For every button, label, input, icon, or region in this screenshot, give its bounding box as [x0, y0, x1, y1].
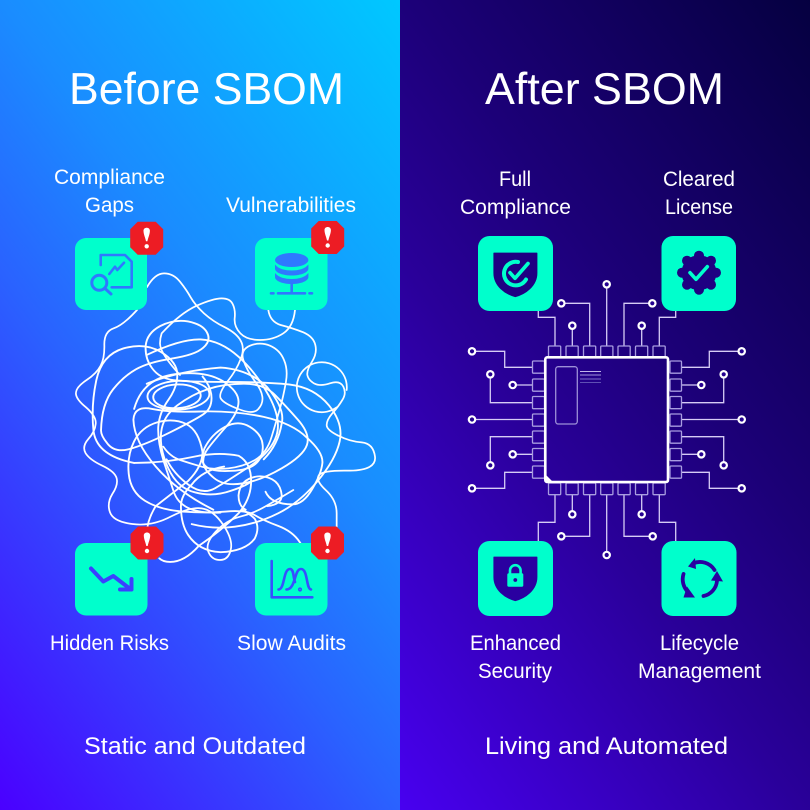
label: Enhanced Security: [470, 632, 561, 683]
badge: alert: [311, 526, 344, 560]
badge: alert: [311, 221, 344, 254]
tile: lifecycle management: [662, 541, 736, 616]
title: Before SBOM: Before SBOM: [69, 65, 344, 114]
circuit traces: [475, 288, 738, 552]
label: Lifecycle Management: [638, 632, 761, 683]
tile: slow audits: [255, 526, 344, 616]
label: Slow Audits: Slow Audits: [237, 632, 346, 655]
chip pads: [532, 346, 682, 495]
title: After SBOM: After SBOM: [485, 65, 724, 114]
label: Full Compliance: [460, 168, 571, 219]
label: Lifecycle Management: Management: [638, 660, 761, 683]
label: Compliance Gaps: Compliance: [54, 166, 165, 189]
tangled lines: [76, 273, 375, 562]
panel: before SBOM: [0, 0, 400, 810]
label: Lifecycle Management: Lifecycle: [660, 632, 739, 655]
caption: Living and Automated: Living and Automated: [485, 733, 728, 760]
label: Cleared License: License: [665, 196, 733, 219]
caption: Static and Outdated: Static and Outdated: [84, 733, 306, 760]
tile: vulnerabilities: [255, 221, 344, 310]
label: Compliance Gaps: Gaps: [85, 194, 134, 217]
label: Compliance Gaps: [54, 166, 165, 217]
label: Hidden Risks: Hidden Risks: [50, 632, 169, 655]
tile: cleared license: [662, 236, 736, 311]
icon: shield with padlock: [494, 557, 537, 600]
label: Cleared License: Cleared: [663, 168, 735, 191]
tile: hidden risks: [75, 526, 164, 616]
tile: enhanced security: [478, 541, 553, 616]
panel: after SBOM: [400, 0, 810, 810]
icon: database: [271, 253, 312, 293]
label: Cleared License: [663, 168, 735, 219]
microchip: [545, 357, 668, 482]
label: Full Compliance: Full: [499, 168, 531, 191]
label: Full Compliance: Compliance: [460, 196, 571, 219]
icon: circular arrows: [683, 558, 723, 598]
icon: shield with check: [494, 253, 537, 296]
badge: alert: [130, 526, 164, 560]
icon: bell curve chart: [272, 561, 312, 597]
circuit nodes: [469, 281, 745, 558]
icon: seal with check: [677, 251, 721, 295]
tile: compliance gaps: [75, 222, 163, 310]
tile: full compliance: [478, 236, 553, 311]
icon: report with magnifier: [92, 255, 132, 294]
label: Enhanced Security: Enhanced: [470, 632, 561, 655]
badge: alert: [130, 222, 163, 255]
icon: falling trend arrow: [91, 568, 132, 590]
label: Vulnerabilities: Vulnerabilities: [226, 194, 356, 217]
label: Enhanced Security: Security: [478, 660, 552, 683]
